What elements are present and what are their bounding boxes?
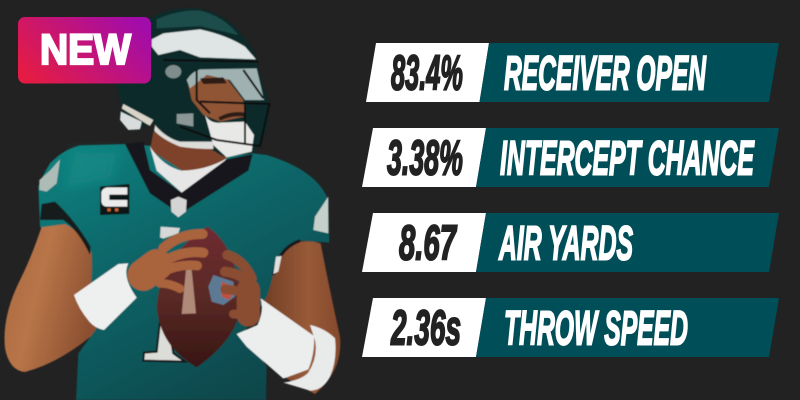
right wrist tape [237,298,314,379]
neck [150,132,230,173]
captain patch [100,184,129,215]
value panel [366,43,489,102]
helmet side sensor [165,65,181,78]
value panel [362,213,486,272]
sleeve eagle logo right [313,197,328,233]
right forearm band [283,325,336,391]
white undershirt [150,147,227,193]
player right arm [260,241,340,394]
palm [143,265,157,275]
visor [187,68,264,100]
white sleeve-side stripe [273,256,282,274]
fingers [163,234,203,248]
ear pad [120,112,142,130]
value 2.36s: 2.36s [390,302,461,356]
helmet [117,8,270,157]
face [188,75,245,122]
football [157,227,241,367]
stat row: intercept chance [362,128,779,187]
label panel [480,43,779,102]
facemask bars [163,60,269,146]
helmet white wing [152,29,256,59]
value 3.38%: 3.38% [387,132,463,186]
jersey number [143,322,185,362]
C letter [101,187,127,207]
left wristband [74,263,137,330]
label air yards: AIR YARDS [498,218,633,270]
patch stars [107,208,118,211]
label panel [476,213,779,272]
player left arm [4,224,100,372]
football shield logo [208,275,235,305]
right hand [225,255,255,317]
left sleeve stripe [40,202,91,255]
value 83.4%: 83.4% [391,46,463,100]
football laces [182,270,196,314]
NEW badge text: NEW [40,26,131,74]
right sleeve trim [273,241,300,275]
black collar [125,142,253,214]
NFL shield [171,197,187,217]
moustache and eye shadow [200,77,245,121]
label panel [476,128,779,187]
stat row: receiver open [366,43,779,102]
sleeve eagle logo left [39,159,60,192]
jersey shoulder shading [63,150,120,190]
jersey wordmark [160,227,180,239]
value panel [362,298,486,357]
label panel [476,298,779,357]
helmet white jaw strip [154,125,213,149]
helmet shell [117,8,270,157]
value panel [362,128,486,187]
left hand [143,234,203,289]
stat row: throw speed [362,298,779,357]
player photo: quarterback holding football [4,8,340,400]
helmet crown highlight [157,11,238,35]
palm [213,290,283,315]
chin strap [205,115,254,157]
jersey [38,144,329,400]
NEW badge [18,17,151,84]
value 8.67: 8.67 [399,216,458,270]
stat row: air yards [362,213,779,272]
fingers [227,255,252,278]
